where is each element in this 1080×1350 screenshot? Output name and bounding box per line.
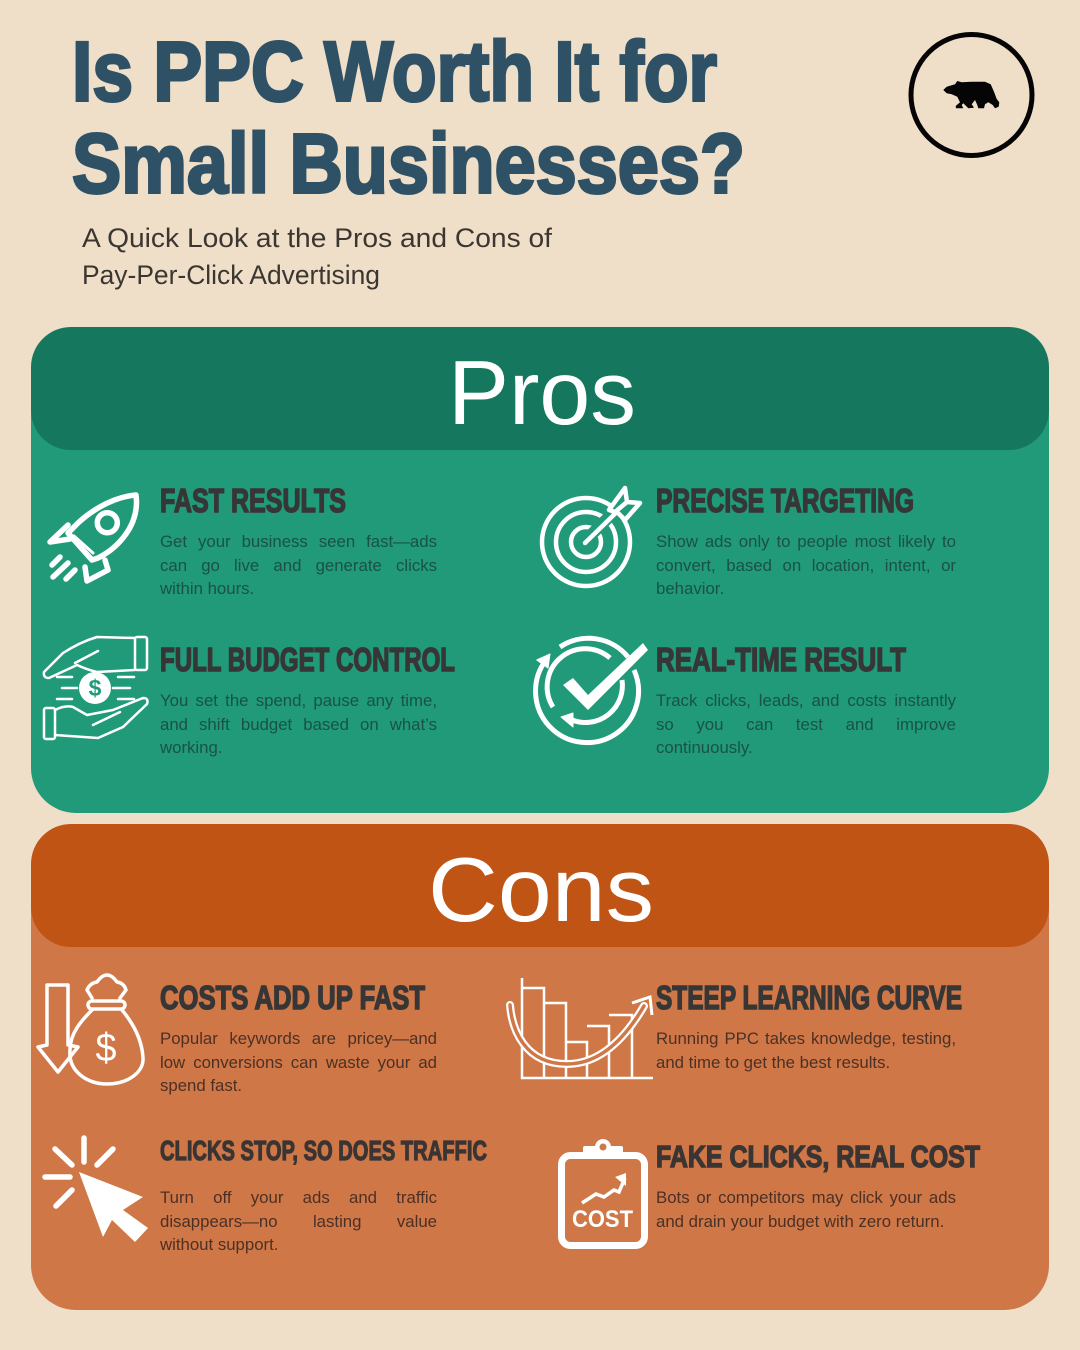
body: steep learning curve: Running PPC takes knowledge, testing, [656,1029,956,1048]
subtitle: A Quick Look at the Pros and Cons of [82,223,553,253]
body: clicks stop: disappears—no lasting value [160,1212,437,1231]
body: costs add up fast [160,1027,437,1098]
body: fast results: within hours. [160,579,254,598]
subtitle: Pay-Per-Click Advertising [82,260,380,290]
icon: cursor click [45,1138,148,1242]
item: clicks stop [45,1135,487,1257]
body: fast results [160,530,437,601]
body: full budget control [160,689,437,760]
heading: steep learning curve: STEEP LEARNING CURVE [656,979,962,1016]
icon: rocket [50,495,136,581]
item: full budget control [44,637,455,760]
body: precise targeting: behavior. [656,579,724,598]
body: real-time result: so you can test and improve [656,715,956,734]
body: fake clicks [656,1186,956,1234]
icon: money bag and down arrow [38,975,143,1084]
body: fast results: Get your business seen fast—ads [160,532,437,551]
body: real-time result: continuously. [656,738,753,757]
body: precise targeting [656,530,956,601]
heading: precise targeting: PRECISE TARGETING [656,482,914,519]
icon: bar chart with curve [510,978,653,1078]
body: real-time result: Track clicks, leads, and costs instantly [656,691,956,710]
body: precise targeting: convert, based on location, intent, or [656,556,956,575]
item: fake clicks [562,1139,980,1246]
body: steep learning curve [656,1027,956,1075]
body: real-time result [656,689,956,760]
title: Is PPC Worth It for [72,24,717,118]
body: fast results: can go live and generate clicks [160,556,437,575]
body: full budget control: and shift budget based on what’s [160,715,437,734]
pros heading: Pros [448,343,636,444]
item: steep learning curve [510,978,962,1078]
cons header band [31,824,1049,947]
heading: costs add up fast: COSTS ADD UP FAST [160,979,425,1016]
body: clicks stop: without support. [160,1235,278,1254]
body: steep learning curve: and time to get the best results. [656,1053,890,1072]
icon: dollar coin: $ [89,675,102,701]
heading: real-time result: REAL-TIME RESULT [656,641,906,678]
heading: clicks stop: CLICKS STOP, SO DOES TRAFFIC [160,1135,487,1166]
item: real-time result [536,638,956,760]
body: costs add up fast: Popular keywords are pricey—and [160,1029,437,1048]
title [72,24,745,210]
icon: clipboard cost: COST [572,1206,633,1233]
icon: hands and coin [44,637,147,739]
body: full budget control: working. [160,738,222,757]
icon: check with cycle arrows [536,638,648,743]
body: fake clicks: Bots or competitors may click your ads [656,1188,956,1207]
panel: pros [31,327,1049,813]
body: costs add up fast: low conversions can waste your ad [160,1053,437,1072]
icon: clipboard cost [562,1139,644,1246]
item: fast results [50,482,437,601]
body: precise targeting: Show ads only to people most likely to [656,532,956,551]
body: clicks stop: Turn off your ads and traffic [160,1188,437,1207]
panel: cons [31,824,1049,1310]
icon: dollar coin [79,672,111,704]
item: precise targeting [542,482,956,601]
body: costs add up fast: spend fast. [160,1076,242,1095]
subtitle [82,223,553,290]
pros header band [31,327,1049,450]
heading: fake clicks: FAKE CLICKS, REAL COST [656,1139,980,1174]
body: clicks stop [160,1186,437,1257]
heading: fast results: FAST RESULTS [160,482,346,519]
cons heading: Cons [428,840,654,941]
title: Small Businesses? [72,116,745,210]
dollar sign: $ [96,1026,116,1070]
icon: bear logo [911,34,1032,156]
body: fake clicks: and drain your budget with zero return. [656,1212,944,1231]
body: full budget control: You set the spend, pause any time, [160,691,437,710]
item: costs add up fast [38,975,437,1098]
heading: full budget control: FULL BUDGET CONTROL [160,641,455,678]
icon: target and arrow [542,488,640,586]
